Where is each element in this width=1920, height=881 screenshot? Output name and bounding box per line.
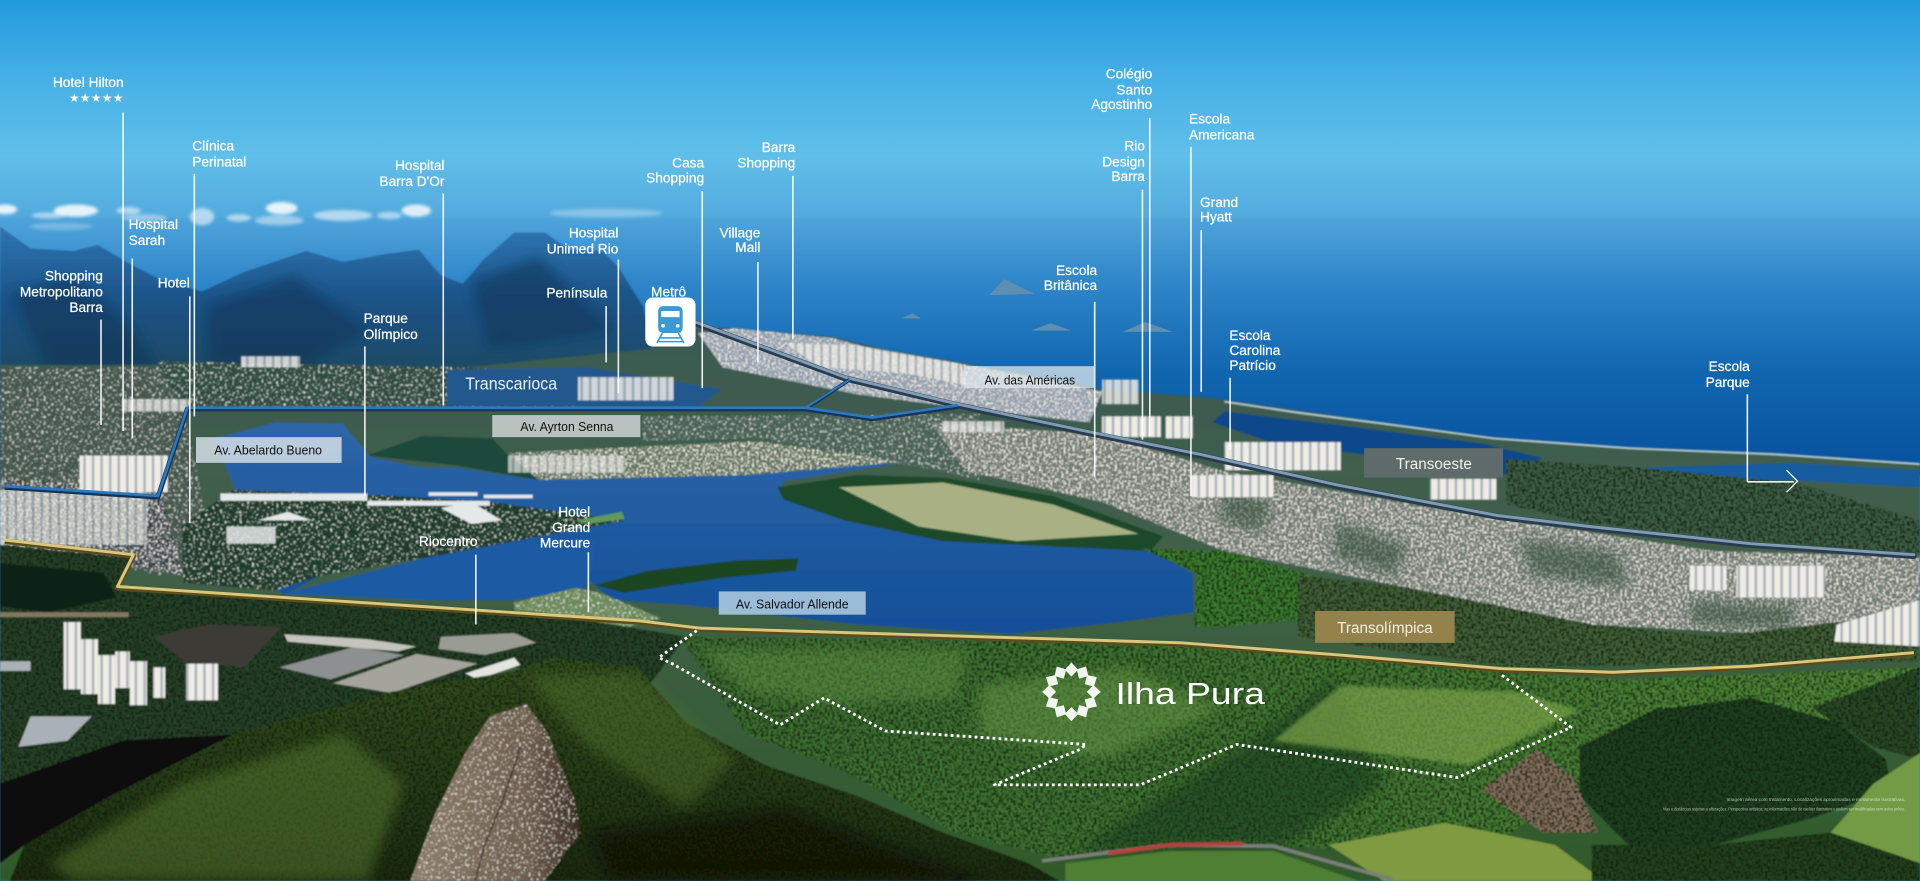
bottom right forest — [1592, 833, 1920, 881]
field light area west — [980, 667, 1224, 759]
land base — [0, 328, 1920, 881]
label: Riocentro: Riocentro — [419, 534, 478, 549]
rock crack — [475, 747, 520, 880]
label: Clínica Perinatal: Clínica — [192, 139, 235, 154]
road: Transolímpica — [5, 540, 1914, 673]
label: Transcarioca: Transcarioca — [465, 373, 558, 393]
label: Hospital Sarah — [129, 217, 178, 438]
tag: Av. Salvador Allende — [719, 591, 866, 615]
label: Colégio Santo Agostinho — [1091, 66, 1153, 436]
mangrove islet — [595, 558, 798, 593]
label: Escola Carolina Patrício: Carolina — [1229, 343, 1281, 358]
wetlands green — [1141, 549, 1347, 627]
label: Grand Hyatt: Hyatt — [1200, 210, 1232, 225]
label: Casa Shopping: Shopping — [646, 170, 704, 185]
label: Hospital Barra D'Or: Barra D'Or — [379, 174, 445, 189]
label: Metrô: Metrô — [651, 284, 686, 299]
mountains — [0, 227, 655, 380]
road: Transoeste — [696, 322, 1914, 556]
foreground mountain — [10, 658, 1059, 881]
pale road left — [0, 612, 129, 617]
lake — [214, 422, 1194, 634]
road: Transcarioca — [5, 380, 958, 497]
label: Hotel: Hotel — [158, 276, 190, 291]
warehouses — [279, 633, 536, 693]
label: Rio Design Barra — [1102, 139, 1145, 440]
ilha pura field — [680, 637, 1920, 857]
label: Village Mall: Mall — [735, 240, 760, 255]
label: Hospital Sarah: Hospital — [129, 217, 178, 232]
tag: Transoeste: Transoeste — [1396, 456, 1472, 473]
dark lower slope — [588, 808, 980, 880]
label: Parque Olímpico — [364, 311, 418, 496]
label: Hotel Grand Mercure: Grand — [552, 520, 590, 535]
label: Hotel Hilton — [53, 75, 124, 431]
islands — [901, 279, 1173, 332]
label: Hospital Unimed Rio: Hospital — [569, 226, 618, 241]
golf course island — [778, 475, 1163, 551]
far left city dark — [0, 478, 184, 575]
label: Hotel Hilton: ★★★★★ — [69, 91, 124, 105]
mountain shading — [12, 257, 612, 373]
label: Colégio Santo Agostinho: Colégio — [1106, 66, 1153, 81]
fine print: Imagem aérea com tratamento. Localizações aproximadas e meramente ilustrativas. — [1727, 797, 1905, 803]
label: Village Mall: Village — [720, 226, 761, 241]
tag: Transolímpica — [1315, 611, 1455, 643]
label: Escola Britânica — [1044, 263, 1098, 478]
label: Escola Parque with arrow: Parque — [1706, 375, 1750, 390]
label: Hospital Sarah: Sarah — [129, 233, 165, 248]
building blocks — [0, 356, 1920, 647]
label: Hotel Grand Mercure — [540, 505, 591, 612]
field dark band — [1078, 680, 1384, 851]
label: Escola Americana — [1189, 112, 1255, 496]
city suburbs — [931, 422, 1920, 637]
label: Shopping Metropolitano Barra: Shopping — [45, 268, 103, 283]
label: Hospital Barra D'Or: Hospital — [395, 158, 444, 173]
label: Escola Carolina Patrício — [1229, 328, 1281, 449]
label: Colégio Santo Agostinho: Agostinho — [1091, 97, 1153, 112]
label: Escola Parque with arrow — [1706, 359, 1798, 492]
left campus — [0, 661, 92, 747]
southern left land — [0, 545, 686, 784]
right meadow — [1831, 753, 1920, 863]
label: Clínica Perinatal: Perinatal — [192, 155, 246, 170]
east lagoon — [1641, 463, 1920, 487]
tag: Av. Abelardo Bueno: Av. Abelardo Bueno — [214, 442, 322, 457]
east wetlands — [1506, 459, 1920, 553]
tag: Av. das Américas — [964, 366, 1095, 388]
olympic park halls — [220, 492, 533, 544]
label: Hospital Unimed Rio — [547, 226, 619, 393]
tag: Av. das Américas: Av. das Américas — [984, 372, 1076, 387]
pink rock — [1482, 749, 1598, 833]
label: Shopping Metropolitano Barra: Metropolitano — [20, 284, 103, 299]
golf course — [839, 482, 1139, 541]
field light area north-west — [698, 649, 967, 704]
mid band vegetation — [1298, 575, 1920, 667]
dark left slope — [0, 735, 233, 863]
label: Escola Carolina Patrício: Escola — [1229, 328, 1271, 343]
label: Rio Design Barra: Design — [1102, 155, 1145, 170]
landscape — [0, 227, 1920, 881]
left urban area — [0, 367, 208, 575]
tag: Transolímpica: Transolímpica — [1337, 620, 1433, 637]
tag: Av. Abelardo Bueno — [196, 437, 342, 463]
label: Hospital Barra D'Or — [379, 158, 445, 405]
label: Península — [546, 286, 608, 362]
label: Escola Parque with arrow: Escola — [1709, 359, 1750, 374]
label: Escola Americana: Escola — [1189, 112, 1230, 127]
label: Hotel Grand Mercure: Mercure — [540, 535, 591, 550]
label: Parque Olímpico: Olímpico — [364, 327, 418, 342]
white tower cluster — [64, 622, 218, 705]
label: Casa Shopping: Casa — [672, 156, 704, 171]
label: Península: Península — [546, 286, 608, 301]
tag: Av. Ayrton Senna: Av. Ayrton Senna — [520, 419, 614, 434]
suburb green patches — [1218, 490, 1800, 631]
north urban strip — [698, 328, 1102, 422]
beach line — [1224, 402, 1920, 464]
icon: metro train — [645, 298, 696, 347]
icon: star emblem — [1042, 662, 1101, 721]
label: Escola Britânica: Britânica — [1044, 278, 1098, 293]
label: Riocentro — [419, 534, 478, 624]
peninsula south shore — [514, 588, 661, 631]
northern lake shore — [508, 441, 906, 480]
bottom meadow center — [1065, 851, 1359, 881]
olympic peninsula — [181, 490, 624, 590]
bottom meadow — [1329, 823, 1604, 881]
fine print — [1663, 797, 1905, 813]
rock face — [410, 704, 580, 881]
ocean — [0, 218, 1920, 475]
site boundary dotted — [659, 631, 1571, 785]
logo: Ilha Pura — [1042, 662, 1266, 721]
label: Barra Shopping: Barra — [762, 140, 796, 155]
label: Rio Design Barra: Rio — [1124, 139, 1145, 154]
sky — [0, 0, 1920, 223]
car park — [153, 624, 282, 667]
barra towers — [784, 343, 967, 386]
field light areas — [1273, 686, 1580, 765]
label: Village Mall — [720, 226, 761, 362]
label: Barra Shopping: Shopping — [737, 156, 795, 171]
plains behind lake — [159, 361, 576, 408]
label: Parque Olímpico: Parque — [364, 311, 408, 326]
tag: Transoeste — [1364, 448, 1503, 478]
label: Escola Britânica: Escola — [1056, 263, 1098, 278]
right dark hill — [1580, 698, 1892, 845]
label: Hotel Grand Mercure: Hotel — [558, 505, 590, 520]
lake lower bay — [282, 539, 598, 600]
right upper forest — [1812, 667, 1920, 759]
label: Colégio Santo Agostinho: Santo — [1116, 82, 1153, 97]
tag: Av. Ayrton Senna — [492, 415, 640, 437]
label: Escola Americana: Americana — [1189, 128, 1255, 143]
north shore grey land — [643, 414, 980, 480]
north shore dark green — [367, 436, 539, 480]
hotel islet — [576, 512, 624, 524]
label: Escola Carolina Patrício: Patrício — [1229, 358, 1276, 373]
tag: Av. Salvador Allende: Av. Salvador Allende — [736, 597, 849, 612]
label: Hospital Unimed Rio: Unimed Rio — [547, 241, 619, 256]
label: Shopping Metropolitano Barra — [20, 268, 103, 425]
sunlit forest on foreground ridge — [49, 735, 404, 880]
dark forest left — [0, 563, 116, 612]
label: Barra Shopping — [737, 140, 796, 339]
logo wordmark: Ilha Pura — [1116, 677, 1266, 711]
coastal lagoon — [1212, 411, 1543, 475]
label: Casa Shopping — [646, 156, 704, 388]
bottom road — [1042, 844, 1392, 879]
label: Grand Hyatt: Grand — [1200, 195, 1238, 210]
transcarioca water band — [447, 367, 722, 407]
label: Grand Hyatt — [1200, 195, 1238, 392]
sunlit forest on ridge top — [527, 673, 735, 808]
label: Hotel Hilton: Hotel Hilton — [53, 75, 124, 90]
label: Clínica Perinatal — [192, 139, 246, 416]
label: Rio Design Barra: Barra — [1111, 169, 1145, 184]
label: Shopping Metropolitano Barra: Barra — [69, 300, 103, 315]
clouds — [0, 202, 662, 230]
